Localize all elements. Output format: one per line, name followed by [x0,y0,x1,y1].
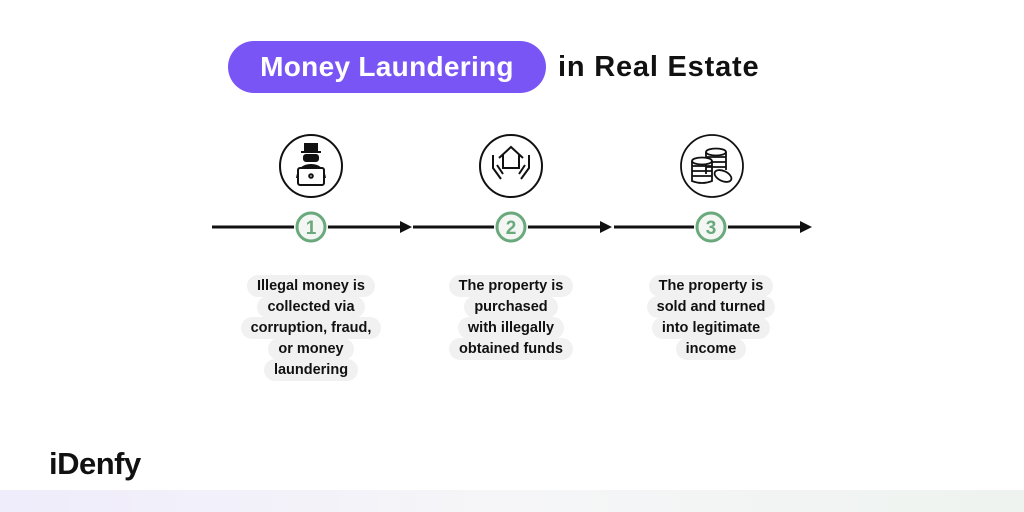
icon: hacker [280,135,342,197]
title suffix: in Real Estate [558,51,759,83]
title pill [228,41,546,93]
arrow 2 [413,221,612,233]
text: step 3: income [686,341,736,357]
text: step 3: into legitimate [662,320,760,336]
step 2 number: 2 [506,218,516,239]
step 2 number [494,210,528,244]
text: step 1: Illegal money is [257,278,365,294]
text: step 2: purchased [474,299,548,315]
text: step 1: or money [278,341,344,357]
icon: house in hands [480,135,542,197]
step 3 number: 3 [706,218,716,239]
title [228,41,759,93]
text: step 1 [241,275,381,381]
step 1 number [294,210,328,244]
text: step 3: sold and turned [657,299,765,315]
text: step 1: collected via [267,299,355,315]
step 1 number: 1 [306,218,317,239]
text: step 2: with illegally [468,320,554,336]
logo: iDenfy [49,446,141,481]
icon: coins [681,135,743,197]
step 3 number [694,210,728,244]
text: step 1: laundering [274,362,348,378]
arrow 3 [614,221,812,233]
text: step 2: The property is [459,278,563,294]
text: step 3: The property is [659,278,763,294]
text: step 2: obtained funds [459,341,563,357]
text: step 2 [449,275,573,360]
arrow 1 [212,221,412,233]
bottom gradient strip [0,490,1024,512]
title pill: Money Laundering [260,51,514,82]
text: step 3 [647,275,775,360]
text: step 1: corruption, fraud, [251,320,371,336]
